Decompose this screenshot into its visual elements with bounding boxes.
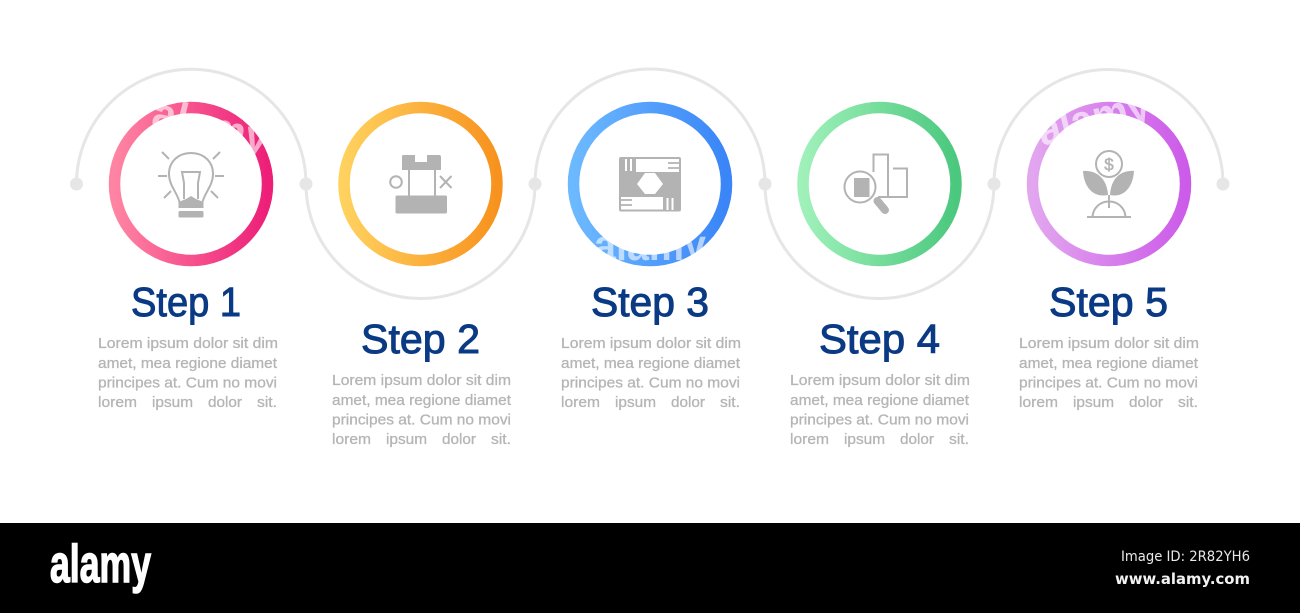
text block: step 2: sit. xyxy=(491,432,511,448)
ring: step 1 xyxy=(114,108,268,260)
heading: step 4: Step 4 xyxy=(819,316,940,362)
text block: step 1 xyxy=(98,336,278,411)
connector: wavy arc line with dots xyxy=(70,69,1230,298)
text block: step 2: amet, mea regione diamet xyxy=(332,393,511,409)
watermark: ring 1: alamy xyxy=(148,88,274,164)
text block: step 1: Lorem ipsum dolor sit dim xyxy=(98,336,278,352)
footer band xyxy=(0,523,1300,613)
text block: step 2: lorem xyxy=(332,432,371,448)
heading: step 1: Step 1 xyxy=(131,279,241,325)
text block: step 1: lorem xyxy=(98,395,137,411)
text block: step 5 xyxy=(1019,336,1199,411)
text block: step 4: amet, mea regione diamet xyxy=(790,393,969,409)
ring: step 4 xyxy=(803,108,956,260)
ring: step 3 xyxy=(574,108,726,260)
text block: step 3: sit. xyxy=(720,395,740,411)
icon: tower with circle and cross xyxy=(390,155,452,214)
text block: step 1: amet, mea regione diamet xyxy=(98,356,277,372)
text block: step 4: lorem xyxy=(790,432,829,448)
text block: step 5: sit. xyxy=(1178,395,1198,411)
text block: step 4: ipsum xyxy=(844,432,885,448)
text block: step 1: ipsum xyxy=(152,395,193,411)
watermark: ring 5: alamy xyxy=(1033,80,1155,156)
text block: step 2: ipsum xyxy=(386,432,427,448)
icon: light bulb xyxy=(158,152,224,218)
text block: step 2: Lorem ipsum dolor sit dim xyxy=(332,373,511,389)
heading: step 2: Step 2 xyxy=(361,316,480,362)
text block: step 4: sit. xyxy=(949,432,969,448)
text block: step 4: Lorem ipsum dolor sit dim xyxy=(790,373,970,389)
icon: handshake square xyxy=(619,157,681,212)
text block: step 1: sit. xyxy=(257,395,277,411)
text block: step 3: ipsum xyxy=(615,395,656,411)
icon: magnifier over bar chart xyxy=(844,154,907,210)
text block: step 3: lorem xyxy=(561,395,600,411)
text block: step 5: ipsum xyxy=(1073,395,1114,411)
text block: step 1: principes at. Cum no movi xyxy=(98,376,277,392)
watermark: ring 3: alamy xyxy=(594,221,706,270)
ring: step 2 xyxy=(344,108,497,260)
text block: step 3: principes at. Cum no movi xyxy=(561,376,740,392)
text block: step 2 xyxy=(332,373,511,448)
heading: step 5: Step 5 xyxy=(1049,279,1168,325)
text block: step 3: amet, mea regione diamet xyxy=(561,356,740,372)
text block: step 5: dolor xyxy=(1129,395,1163,411)
text block: step 2: dolor xyxy=(442,432,476,448)
footer url: www.alamy.com xyxy=(1115,570,1250,588)
footer logo: alamy xyxy=(50,535,151,594)
footer image id: Image ID: 2R82YH6 xyxy=(1121,549,1250,565)
ring: step 5 xyxy=(1032,108,1186,260)
text block: step 3 xyxy=(561,336,741,411)
text block: step 5: amet, mea regione diamet xyxy=(1019,356,1198,372)
text block: step 1: dolor xyxy=(208,395,242,411)
text block: step 5: Lorem ipsum dolor sit dim xyxy=(1019,336,1199,352)
text block: step 3: Lorem ipsum dolor sit dim xyxy=(561,336,741,352)
text block: step 3: dolor xyxy=(671,395,705,411)
text block: step 4: dolor xyxy=(900,432,934,448)
heading: step 3: Step 3 xyxy=(591,279,709,325)
icon: money plant: $ xyxy=(1104,155,1114,174)
text block: step 5: principes at. Cum no movi xyxy=(1019,376,1198,392)
text block: step 2: principes at. Cum no movi xyxy=(332,412,511,428)
text block: step 4: principes at. Cum no movi xyxy=(790,412,969,428)
text block: step 5: lorem xyxy=(1019,395,1058,411)
text block: step 4 xyxy=(790,373,970,448)
icon: money plant xyxy=(1083,151,1134,217)
